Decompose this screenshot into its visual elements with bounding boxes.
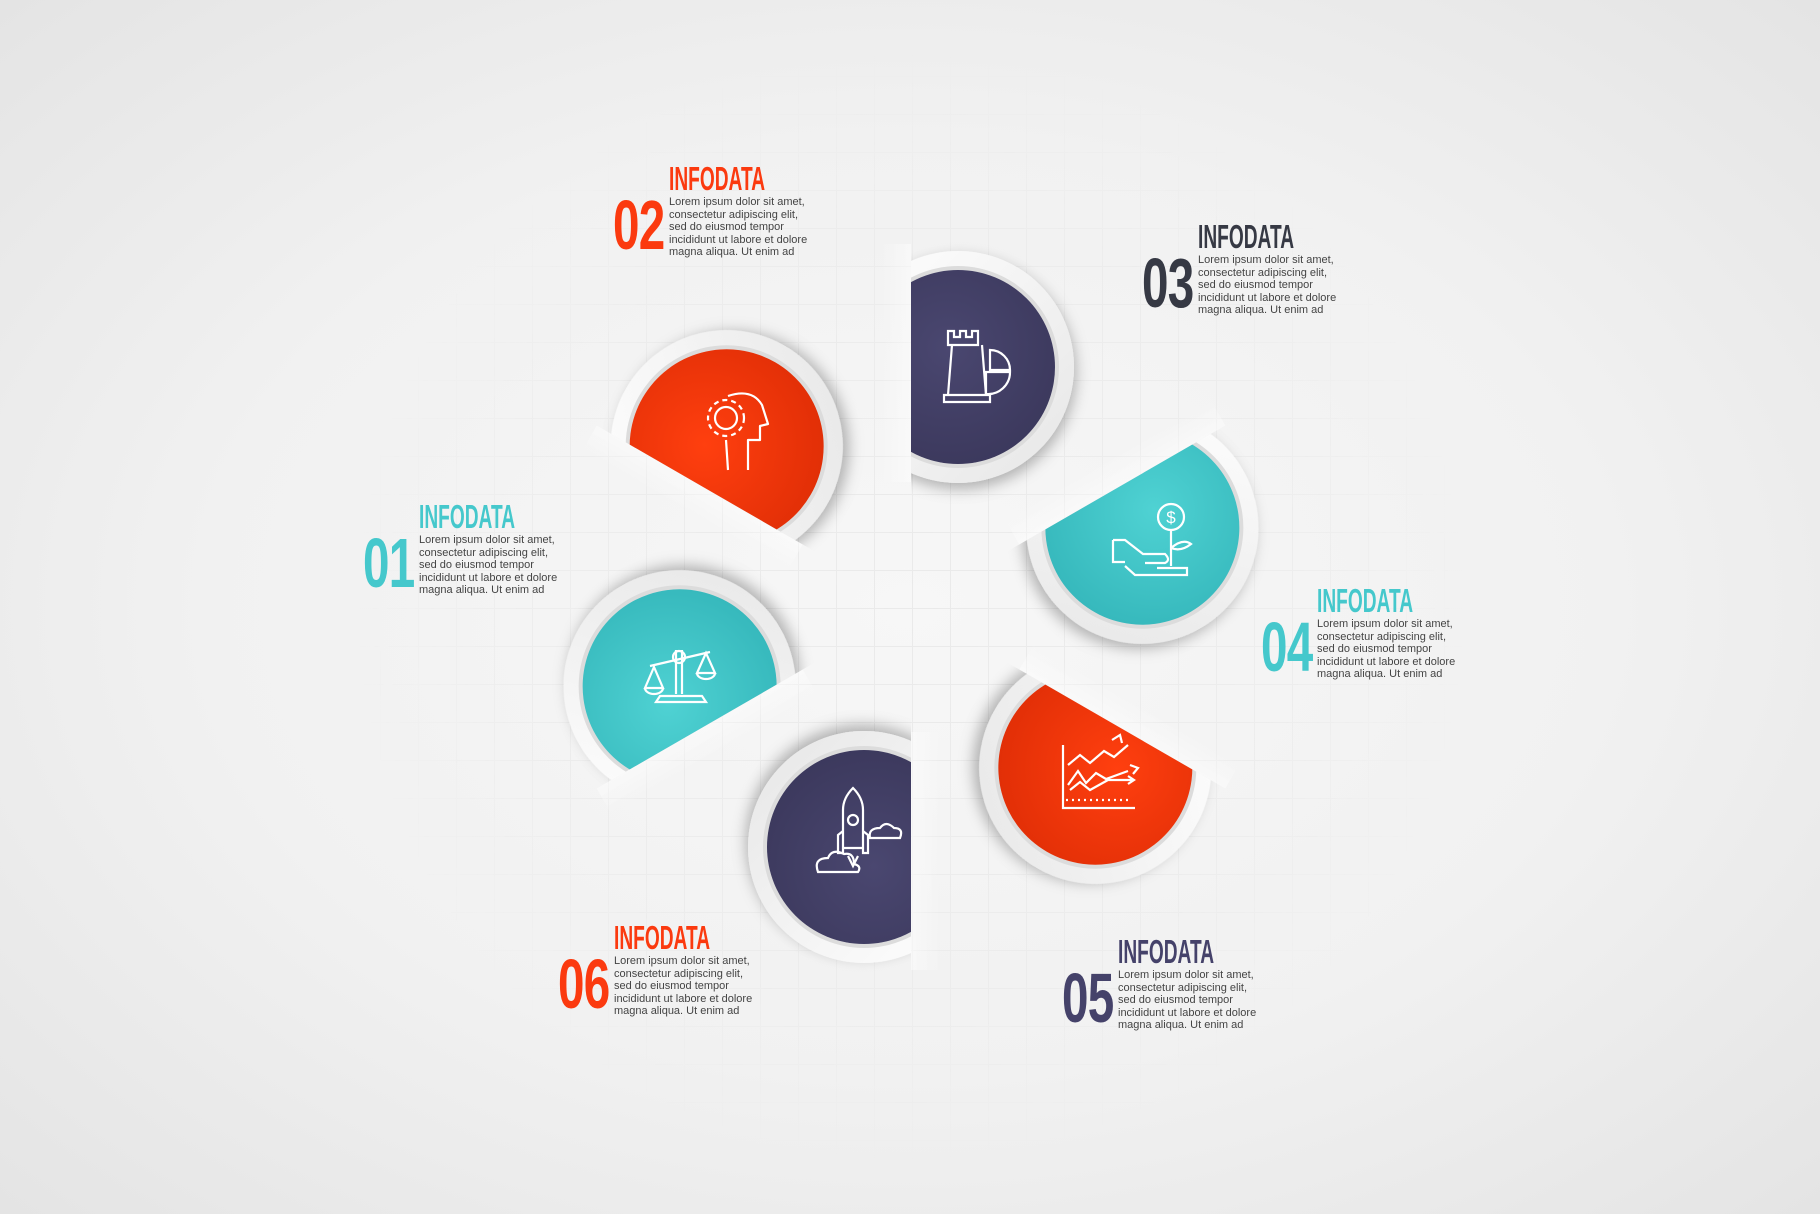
text block 05: 05 — [1062, 959, 1114, 1037]
text block 01: INFODATA — [419, 498, 515, 535]
text block 05: magna aliqua. Ut enim ad — [1118, 1019, 1243, 1031]
icon: head with gear — [708, 393, 768, 470]
text block 03: 03 — [1142, 244, 1194, 322]
text block 06: Lorem ipsum dolor sit amet, — [614, 955, 750, 967]
text block 04 — [1261, 582, 1455, 686]
text block 01 — [363, 498, 557, 602]
text block 02: INFODATA — [669, 160, 765, 197]
text block 05: INFODATA — [1118, 933, 1214, 970]
text block 01: consectetur adipiscing elit, — [419, 546, 548, 558]
text block 06: sed do eiusmod tempor — [614, 980, 729, 992]
text block 02: 02 — [613, 186, 665, 264]
text block 04: incididunt ut labore et dolore — [1317, 656, 1455, 668]
text block 03: magna aliqua. Ut enim ad — [1198, 304, 1323, 316]
text block 06: magna aliqua. Ut enim ad — [614, 1005, 739, 1017]
text block 02 — [613, 160, 807, 264]
icon: chart arrows — [1063, 735, 1138, 808]
text block 02: sed do eiusmod tempor — [669, 221, 784, 233]
text block 03: Lorem ipsum dolor sit amet, — [1198, 254, 1334, 266]
text block 06: INFODATA — [614, 919, 710, 956]
text block 02: incididunt ut labore et dolore — [669, 234, 807, 246]
text block 04: 04 — [1261, 608, 1313, 686]
segment 06 navy — [738, 717, 913, 964]
text block 01: Lorem ipsum dolor sit amet, — [419, 534, 555, 546]
text block 03: incididunt ut labore et dolore — [1198, 292, 1336, 304]
text block 05 — [1062, 933, 1256, 1037]
text block 01: sed do eiusmod tempor — [419, 559, 534, 571]
text block 05: Lorem ipsum dolor sit amet, — [1118, 969, 1254, 981]
segment 01 teal — [560, 558, 806, 780]
text block 01: magna aliqua. Ut enim ad — [419, 584, 544, 596]
text block 04: Lorem ipsum dolor sit amet, — [1317, 618, 1453, 630]
text block 05: consectetur adipiscing elit, — [1118, 982, 1247, 994]
text block 03: consectetur adipiscing elit, — [1198, 266, 1327, 278]
icon: hand with plant — [1113, 504, 1191, 575]
text block 06: 06 — [558, 945, 610, 1023]
text block 03 — [1142, 218, 1336, 322]
text block 04: magna aliqua. Ut enim ad — [1317, 668, 1442, 680]
text block 02: consectetur adipiscing elit, — [669, 208, 798, 220]
text block 05: sed do eiusmod tempor — [1118, 994, 1233, 1006]
circular diagram — [560, 249, 1262, 964]
icon: rook and pie — [944, 331, 1010, 402]
text block 02: magna aliqua. Ut enim ad — [669, 246, 794, 258]
text block 04: INFODATA — [1317, 582, 1413, 619]
text block 01: 01 — [363, 524, 415, 602]
text block 04: consectetur adipiscing elit, — [1317, 630, 1446, 642]
segment 05 orange — [966, 668, 1212, 890]
text block 03: sed do eiusmod tempor — [1198, 279, 1313, 291]
icon: rocket and clouds — [817, 788, 901, 872]
segment 03 navy — [910, 249, 1084, 496]
text block 06 — [558, 919, 752, 1023]
text block 03: INFODATA — [1198, 218, 1294, 255]
text block 01: incididunt ut labore et dolore — [419, 572, 557, 584]
icon: scales — [645, 650, 715, 702]
text block 02: Lorem ipsum dolor sit amet, — [669, 196, 805, 208]
segment 02 orange — [610, 324, 856, 546]
text block 06: consectetur adipiscing elit, — [614, 968, 743, 980]
text block 04: sed do eiusmod tempor — [1317, 643, 1432, 655]
text block 05: incididunt ut labore et dolore — [1118, 1006, 1256, 1018]
segment 04 teal — [1016, 434, 1262, 656]
icon: hand with plant: $ — [1166, 508, 1176, 527]
text block 06: incididunt ut labore et dolore — [614, 992, 752, 1004]
